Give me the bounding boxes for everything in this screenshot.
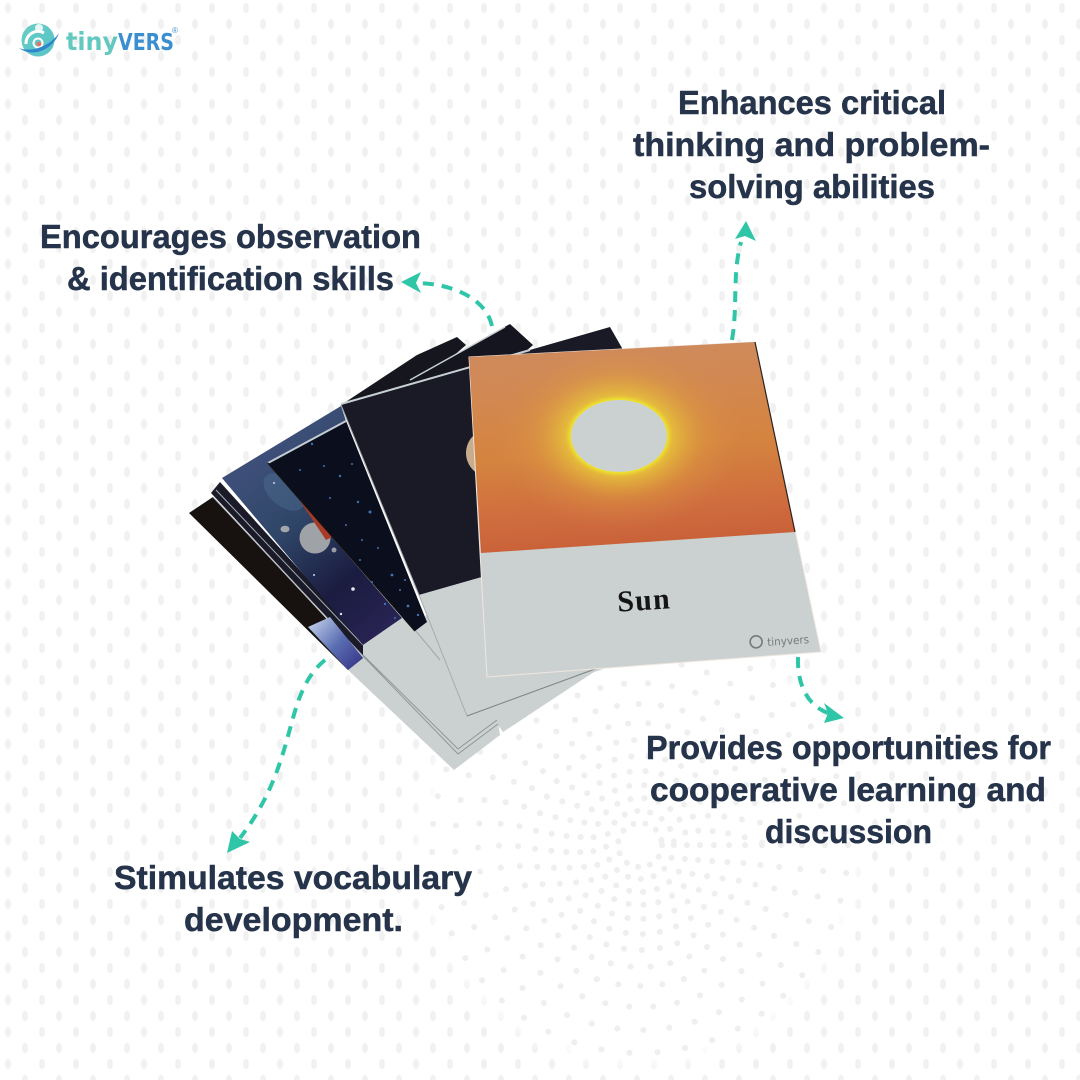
callout: observation skills: Encourages observation [40,218,421,255]
red sliver [298,498,332,540]
card: sun card [469,342,821,677]
arrow: to vocabulary [227,660,325,853]
stars [299,443,419,619]
asteroid [300,522,330,554]
callout: observation skills [40,218,421,297]
arrow: to observation skills [401,272,492,326]
earth image sliver [308,617,363,670]
logo: tinyvers: VERS [118,30,174,56]
callout: critical thinking: solving abilities [689,168,935,205]
callout: observation skills: & identification skills [67,260,394,297]
logo icon [19,24,59,56]
moon [466,429,514,477]
card: black back card [189,482,363,670]
callout: vocabulary: development. [184,901,403,938]
callout: cooperative learning: cooperative learning and [650,771,1046,808]
callout: critical thinking: Enhances critical [678,84,946,121]
arrow: to critical thinking [732,221,756,340]
callout: cooperative learning: discussion [765,813,932,850]
logo wordmark: tiny [66,27,118,56]
callout: cooperative learning: Provides opportunities for [646,729,1051,766]
card: blue asteroid card [222,406,402,645]
callout: vocabulary: Stimulates vocabulary [114,859,473,896]
callout: critical thinking [633,84,990,205]
card title: Sun: Sun [616,582,672,619]
card: rear right grey [488,600,640,732]
callout: vocabulary [114,859,473,938]
cards: grey lower stack [348,610,520,770]
card: dark stack top edge [341,337,466,405]
card logo: tinyvers [767,633,810,649]
fan of flash cards [189,324,821,770]
logo: tinyvers [19,24,178,56]
callout: critical thinking: thinking and problem- [633,126,990,163]
card logo [750,632,810,650]
callout: cooperative learning [646,729,1051,850]
card: rear middle [410,324,533,400]
registered mark: ® [172,26,178,35]
card: starfield card [268,421,427,631]
sun disc [571,400,667,472]
card: moon card [341,327,640,716]
arrow: to cooperative learning [798,657,844,723]
